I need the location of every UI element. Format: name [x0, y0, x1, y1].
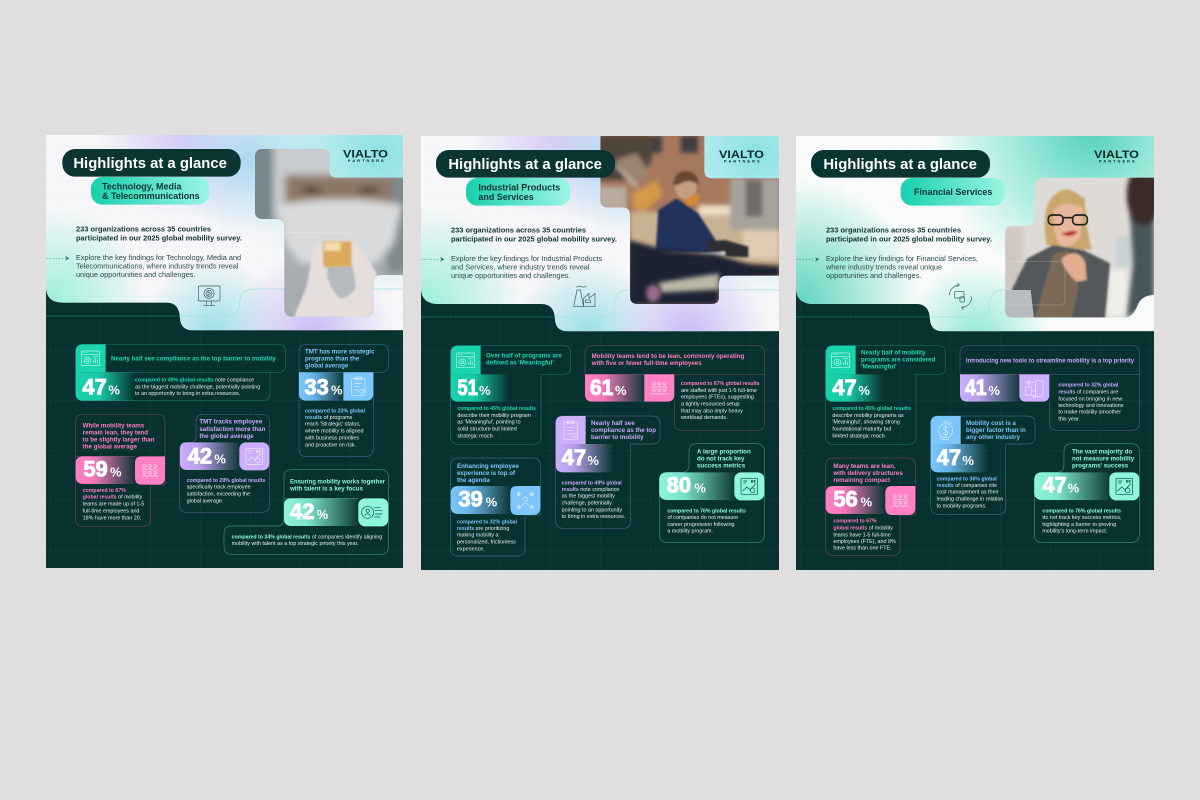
- card: team size: to be slightly larger than: [83, 436, 155, 443]
- card: employee satisfaction: global average.: [187, 498, 223, 504]
- card: employee satisfaction: TMT tracks employee: [199, 419, 263, 426]
- header connector line: [180, 289, 403, 316]
- panel background: [421, 136, 779, 570]
- card: employee satisfaction: the global average: [199, 433, 254, 440]
- intro text: [451, 225, 617, 243]
- card: employee experience: making mobility a: [457, 533, 499, 539]
- card: meaningful programs: defined as 'Meaningful': [486, 359, 554, 366]
- card: measuring success: do not track key success metrics,: [1042, 515, 1122, 521]
- card: measuring success: highlighting a barrier to proving: [1042, 522, 1116, 528]
- card: employee experience: experience is top of: [457, 470, 516, 477]
- card: success metrics: a mobility program.: [667, 529, 713, 535]
- card: compliance barrier: Nearly half see compliance as the top barrier to mobility: [111, 355, 276, 362]
- header gradient background: [796, 136, 1154, 331]
- card: meaningful programs: 51: [457, 375, 478, 400]
- card: meaningful programs: programs are considered: [861, 357, 935, 364]
- card: compliance barrier: as the biggest mobility: [562, 494, 615, 500]
- card: talent alignment: Ensuring mobility works together: [290, 478, 386, 485]
- card: measuring success: mobility's long-term impact.: [1042, 529, 1107, 535]
- statistics cards: [826, 346, 1140, 555]
- panel: Financial Services: [796, 136, 1160, 570]
- card: compliance barrier: Nearly half see: [591, 420, 635, 427]
- card: compliance barrier: compliance as the top: [591, 427, 656, 434]
- header connector line: [930, 290, 1154, 317]
- header: [796, 136, 1160, 331]
- industry pill: [91, 177, 210, 205]
- industry pill: [466, 178, 570, 206]
- card: talent alignment: %: [317, 507, 329, 522]
- card: team size: full-time employees and: [83, 508, 139, 514]
- title pill: [62, 149, 241, 177]
- explore text: unique opportunities and challenges.: [76, 270, 195, 279]
- logo: Vialto Partners: [1094, 149, 1139, 164]
- explore text: opportunities and challenges.: [826, 271, 921, 280]
- card: meaningful programs: limited strategic reach.: [832, 433, 886, 439]
- card: measuring success: %: [1068, 481, 1080, 496]
- card: talent alignment: compared to 34% global results of companies identify aligning: [232, 534, 382, 540]
- card: team size: the global average: [83, 443, 138, 450]
- card: strategic programs: compared to 23% global: [305, 408, 366, 414]
- card: success metrics: 80: [667, 473, 691, 498]
- card: lean teams: global results of mobility: [833, 525, 893, 531]
- card: compliance barrier: results note compliance: [562, 487, 619, 493]
- card: new tools: technology and innovations: [1058, 403, 1124, 409]
- card: mobility cost: results of companies cite: [937, 483, 997, 489]
- card: success metrics: do not track key: [697, 455, 745, 462]
- header: [46, 135, 410, 330]
- intro text: 233 organizations across 35 countries: [76, 224, 211, 233]
- statistics cards: [451, 346, 765, 556]
- explore text: [76, 253, 241, 279]
- card: mobility cost: any other industry: [966, 434, 1021, 441]
- card: meaningful programs: [451, 346, 571, 444]
- card: talent alignment: [224, 470, 388, 554]
- intro text: participated in our 2025 global mobility survey.: [826, 234, 992, 243]
- card: compliance barrier: compared to 49% global results note compliance: [135, 378, 254, 384]
- card: compliance barrier: %: [587, 453, 599, 468]
- statistics cards: [76, 344, 388, 554]
- card: employee experience: the agenda: [457, 477, 490, 484]
- card: measuring success: The vast majority do: [1072, 448, 1132, 455]
- card: success metrics: [659, 444, 764, 542]
- card: success metrics: %: [694, 481, 706, 496]
- arrow: [797, 257, 819, 262]
- card: talent alignment: mobility with talent as a top strategic priority this year.: [232, 541, 359, 547]
- card: success metrics: success metrics: [697, 462, 746, 469]
- photo: smiling businesswoman with glasses: [1005, 178, 1154, 318]
- card: mobility cost: bigger factor than in: [966, 427, 1026, 434]
- card: strategic programs: reach 'Strategic' status,: [305, 422, 361, 428]
- card: team size: global results of mobility: [83, 495, 143, 501]
- card: strategic programs: 33: [304, 374, 329, 399]
- card: mobility cost: 47: [937, 445, 961, 470]
- logo: Vialto Partners: [719, 149, 764, 164]
- explore text: Explore the key findings for Industrial Products: [451, 254, 602, 263]
- card: employee satisfaction: specifically track employee: [187, 485, 251, 491]
- card: lean teams: 56: [833, 487, 858, 512]
- card: success metrics: A large proportion: [697, 448, 751, 455]
- card: strategic programs: programs than the: [305, 356, 360, 363]
- intro text: 233 organizations across 35 countries: [826, 225, 961, 234]
- header gradient background: [421, 136, 779, 331]
- header: [421, 135, 780, 331]
- card: lean teams: teams have 1-5 full-time: [833, 532, 891, 538]
- card: new tools: results of companies are: [1058, 389, 1118, 395]
- card: employee experience: personalized, frictionless: [457, 540, 516, 546]
- card: compliance barrier: [556, 416, 660, 528]
- card: lean teams: with delivery structures: [832, 470, 903, 477]
- explore text: Explore the key findings for Technology, Media and: [76, 253, 241, 262]
- explore text: Explore the key findings for Financial Services,: [826, 254, 978, 263]
- card: meaningful programs: as 'Meaningful', pointing to: [457, 420, 521, 426]
- panel: Technology, Media & Telecommunications: [46, 135, 410, 568]
- card: employee satisfaction: satisfaction more than: [199, 426, 266, 433]
- card: mobility cost: leading challenge in relation: [937, 497, 1003, 503]
- card: meaningful programs: 'Meaningful': [861, 364, 897, 371]
- card: new tools: focused on bringing in new: [1058, 396, 1122, 402]
- card: new tools: [960, 346, 1140, 430]
- title pill: [436, 150, 615, 178]
- card: employee satisfaction: %: [214, 451, 226, 466]
- card: talent alignment: with talent is a key focus: [289, 485, 363, 492]
- card: lean teams: a tightly resourced setup: [681, 401, 740, 407]
- industry pill: & Telecommunications: [102, 191, 200, 201]
- card: compliance barrier: as the biggest mobility challenge, potentially pointing: [135, 384, 260, 390]
- panel background: [796, 136, 1154, 570]
- card: measuring success: compared to 76% global results: [1042, 508, 1121, 514]
- industry pill: Industrial Products: [478, 182, 560, 192]
- card: employee experience: %: [486, 495, 498, 510]
- card: meaningful programs: compared to 45% global results: [832, 406, 911, 412]
- card: lean teams: compared to 67%: [833, 519, 877, 525]
- title pill: Highlights at a glance: [448, 157, 602, 173]
- card: meaningful programs: describe mobility programs as: [832, 413, 904, 419]
- card: meaningful programs: strategic reach.: [457, 433, 494, 439]
- card: team size: teams are made up of 1-5: [83, 502, 144, 508]
- dark section connector line: [796, 316, 930, 318]
- card: lean teams: %: [861, 495, 873, 510]
- intro text: [826, 225, 992, 243]
- card: lean teams: compared to 67% global results: [681, 381, 760, 387]
- card: new tools: this year.: [1058, 417, 1080, 423]
- card: team size: compared to 67%: [83, 488, 126, 494]
- card: meaningful programs: describe their mobility program: [457, 413, 531, 419]
- title pill: Highlights at a glance: [73, 156, 227, 172]
- card: meaningful programs: %: [858, 383, 870, 398]
- card: team size: remain lean, they tend: [83, 429, 148, 436]
- card: meaningful programs: Over half of programs are: [486, 352, 562, 359]
- card: meaningful programs: 47: [832, 375, 857, 400]
- logo: Vialto Partners: VIALTO: [719, 149, 764, 161]
- card: employee satisfaction: compared to 29% global results: [187, 478, 265, 484]
- photo: cleanroom technician holding a chip: [255, 149, 403, 317]
- industry pill: [901, 178, 1005, 206]
- card: mobility cost: %: [962, 453, 974, 468]
- card: lean teams: %: [615, 383, 627, 398]
- card: compliance barrier: compared to 49% global: [562, 480, 622, 486]
- card: meaningful programs: %: [479, 383, 491, 398]
- card: mobility cost: compared to 36% global: [937, 476, 997, 482]
- card: team size: 59: [83, 457, 108, 482]
- industry pill: and Services: [478, 192, 534, 202]
- card: employee experience: [451, 458, 540, 556]
- logo: Vialto Partners: VIALTO: [343, 148, 388, 160]
- card: lean teams: 61: [590, 375, 613, 400]
- card: measuring success: not measure mobility: [1072, 455, 1135, 462]
- intro text: 233 organizations across 35 countries: [451, 225, 586, 234]
- card: employee experience: 39: [458, 487, 483, 512]
- card: measuring success: 47: [1042, 473, 1067, 498]
- logo: Vialto Partners: VIALTO: [1094, 149, 1139, 161]
- explore text: Telecommunications, where industry trends reveal: [76, 262, 239, 271]
- card: employee satisfaction: [180, 414, 270, 512]
- card: mobility cost: cost management as their: [937, 490, 999, 496]
- intro text: participated in our 2025 global mobility survey.: [76, 233, 242, 242]
- card: lean teams: Many teams are lean,: [833, 463, 896, 470]
- card: compliance barrier: challenge, potentially: [562, 500, 612, 506]
- card: team size: While mobility teams: [83, 422, 145, 429]
- card: success metrics: compared to 76% global results: [667, 508, 746, 514]
- card: employee experience: experience.: [457, 546, 485, 552]
- dark section connector line: [421, 316, 555, 318]
- card: lean teams: employees (FTEs), suggesting: [681, 395, 754, 401]
- card: meaningful programs: compared to 45% global results: [457, 406, 536, 412]
- card: lean teams: Mobility teams tend to be lean, commonly operating: [592, 353, 745, 360]
- card: success metrics: of companies do not measure: [667, 515, 738, 521]
- logo: Vialto Partners: PARTNERS: [1099, 159, 1135, 164]
- card: employee experience: compared to 32% global: [457, 519, 518, 525]
- card: lean teams: are staffed with just 1-5 full-time: [681, 388, 757, 394]
- card: lean teams: that may also imply heavy: [681, 408, 743, 414]
- card: compliance barrier: pointing to an opportunity: [562, 507, 622, 513]
- explore text: [451, 254, 602, 280]
- card: new tools: 41: [965, 375, 987, 400]
- card: lean teams: [826, 458, 915, 555]
- card: measuring success: programs' success: [1072, 462, 1129, 469]
- card: strategic programs: global average: [305, 363, 349, 370]
- card: measuring success: [1034, 444, 1139, 542]
- card: meaningful programs: foundational maturity but: [832, 426, 892, 432]
- card: employee experience: results are prioritizing: [457, 526, 509, 532]
- card: strategic programs: and proactive on risk.: [305, 442, 356, 448]
- icon: factory: [574, 286, 595, 307]
- card: compliance barrier: 47: [82, 374, 107, 399]
- intro text: [76, 224, 242, 242]
- card: lean teams: with five or fewer full-time employees: [591, 360, 702, 367]
- icon: monitor with play button: [198, 286, 220, 306]
- panel background: [46, 135, 403, 568]
- card: lean teams: [585, 346, 765, 430]
- industry pill: Technology, Media: [102, 181, 183, 191]
- explore text: where industry trends reveal unique: [825, 263, 942, 272]
- card: compliance barrier: 47: [562, 445, 586, 470]
- card: meaningful programs: 'Meaningful', showing strong: [832, 420, 900, 426]
- card: lean teams: workload demands.: [680, 415, 728, 421]
- card: strategic programs: results of programs: [305, 415, 353, 421]
- card: talent alignment: 42: [290, 499, 314, 524]
- card: team size: [76, 414, 165, 526]
- logo: Vialto Partners: PARTNERS: [724, 159, 760, 164]
- card: strategic programs: TMT has more strategic: [305, 349, 375, 356]
- header gradient background: [46, 135, 403, 330]
- arrow: [422, 257, 444, 262]
- title pill: [811, 150, 990, 178]
- card: team size: %: [110, 465, 122, 480]
- explore text: [825, 254, 978, 280]
- intro text: participated in our 2025 global mobility survey.: [451, 234, 617, 243]
- card: compliance barrier: barrier to mobility: [591, 434, 644, 441]
- arrow: [47, 256, 69, 261]
- dark section connector line: [46, 315, 180, 317]
- card: strategic programs: where mobility is aligned: [304, 429, 364, 435]
- card: meaningful programs: [826, 346, 946, 444]
- card: new tools: %: [988, 383, 1000, 398]
- card: compliance barrier: to bring in extra resources.: [562, 514, 625, 520]
- card: success metrics: career progression following: [667, 522, 735, 528]
- panel: Industrial Products and Services: [421, 135, 780, 570]
- card: employee satisfaction: 42: [188, 443, 212, 468]
- explore text: and Services, where industry trends reveal: [451, 263, 590, 272]
- card: new tools: Introducing new tools to streamline mobility is a top priority: [966, 357, 1135, 364]
- card: employee satisfaction: satisfaction, exceeding the: [187, 492, 250, 498]
- card: mobility cost: to mobility programs.: [937, 503, 987, 509]
- card: meaningful programs: solid structure but limited: [457, 426, 517, 432]
- logo: Vialto Partners: [343, 148, 388, 163]
- card: team size: 18% have more than 20.: [83, 515, 141, 521]
- header connector line: [555, 290, 779, 317]
- photo: factory worker with respirator: [598, 135, 780, 305]
- card: meaningful programs: Nearly half of mobility: [861, 350, 926, 357]
- card: strategic programs: with business priorities: [304, 435, 359, 441]
- card: lean teams: remaining compact: [833, 477, 890, 484]
- title pill: Highlights at a glance: [823, 157, 977, 173]
- card: compliance barrier: %: [108, 382, 120, 397]
- card: lean teams: employees (FTE), and 8%: [833, 539, 896, 545]
- logo: Vialto Partners: PARTNERS: [348, 158, 384, 163]
- card: mobility cost: Mobility cost is a: [966, 420, 1016, 427]
- card: compliance barrier: to an opportunity to bring in extra resources.: [135, 391, 240, 397]
- card: strategic programs: %: [331, 382, 343, 397]
- card: compliance barrier: [76, 344, 286, 401]
- card: new tools: compared to 32% global: [1058, 383, 1119, 389]
- card: strategic programs: [299, 344, 388, 457]
- card: mobility cost: [931, 416, 1035, 514]
- icon: finance cycle: [949, 283, 972, 310]
- card: new tools: to make mobility smoother: [1058, 410, 1121, 416]
- explore text: unique opportunities and challenges.: [451, 271, 570, 280]
- industry pill: Financial Services: [914, 187, 992, 197]
- card: employee experience: Enhancing employee: [457, 463, 519, 470]
- card: lean teams: have less than one FTE.: [833, 546, 892, 552]
